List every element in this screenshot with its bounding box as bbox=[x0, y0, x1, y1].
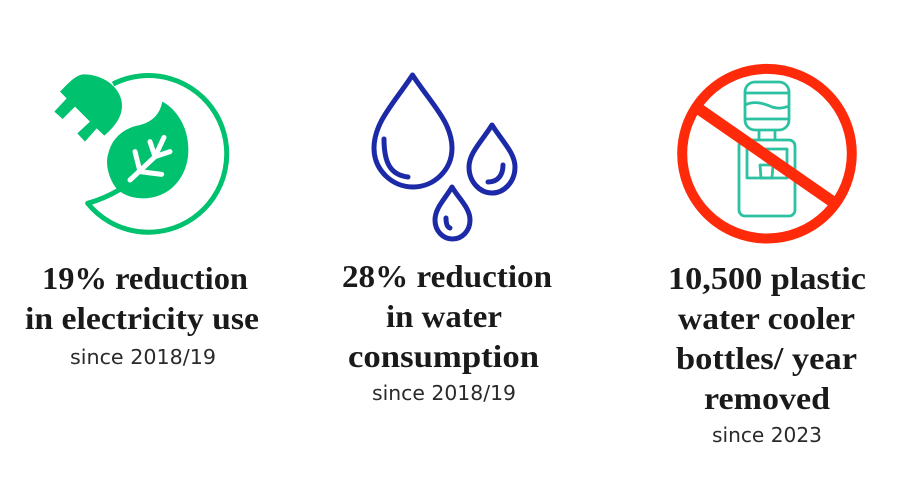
heading: bottles: removed bbox=[704, 380, 830, 416]
heading: water bbox=[342, 258, 552, 374]
leaf bbox=[107, 102, 188, 198]
heading: bottles: bottles/ year bbox=[676, 340, 857, 376]
heading: electricity: 19% reduction bbox=[42, 260, 248, 296]
prohibition sign bbox=[682, 69, 852, 238]
large drop highlight bbox=[384, 139, 408, 177]
heading: water: consumption bbox=[348, 338, 539, 374]
icon: green plug and leaf bbox=[54, 74, 227, 232]
right drop highlight bbox=[488, 165, 503, 182]
icon: water drops bbox=[374, 75, 515, 239]
heading: bottles: 10,500 plastic bbox=[668, 260, 866, 296]
heading: water: 28% reduction bbox=[342, 258, 552, 294]
large drop bbox=[374, 75, 452, 187]
heading: bottles bbox=[668, 260, 866, 416]
small drop bbox=[435, 187, 470, 239]
heading: electricity bbox=[25, 260, 259, 336]
water cooler bbox=[739, 82, 795, 216]
leaf veins bbox=[130, 137, 170, 180]
heading: water: in water bbox=[386, 298, 502, 334]
icon: crossed-out water cooler bbox=[682, 69, 852, 238]
small drop highlight bbox=[446, 218, 450, 228]
plug bbox=[54, 74, 122, 142]
note: water since: since 2018/19 bbox=[372, 381, 516, 405]
heading: bottles: water cooler bbox=[678, 300, 855, 336]
note: bottles since: since 2023 bbox=[712, 423, 822, 447]
right drop bbox=[469, 125, 515, 193]
heading: electricity: in electricity use bbox=[25, 300, 259, 336]
note: electricity since: since 2018/19 bbox=[70, 345, 216, 369]
ring cable bbox=[88, 76, 227, 232]
